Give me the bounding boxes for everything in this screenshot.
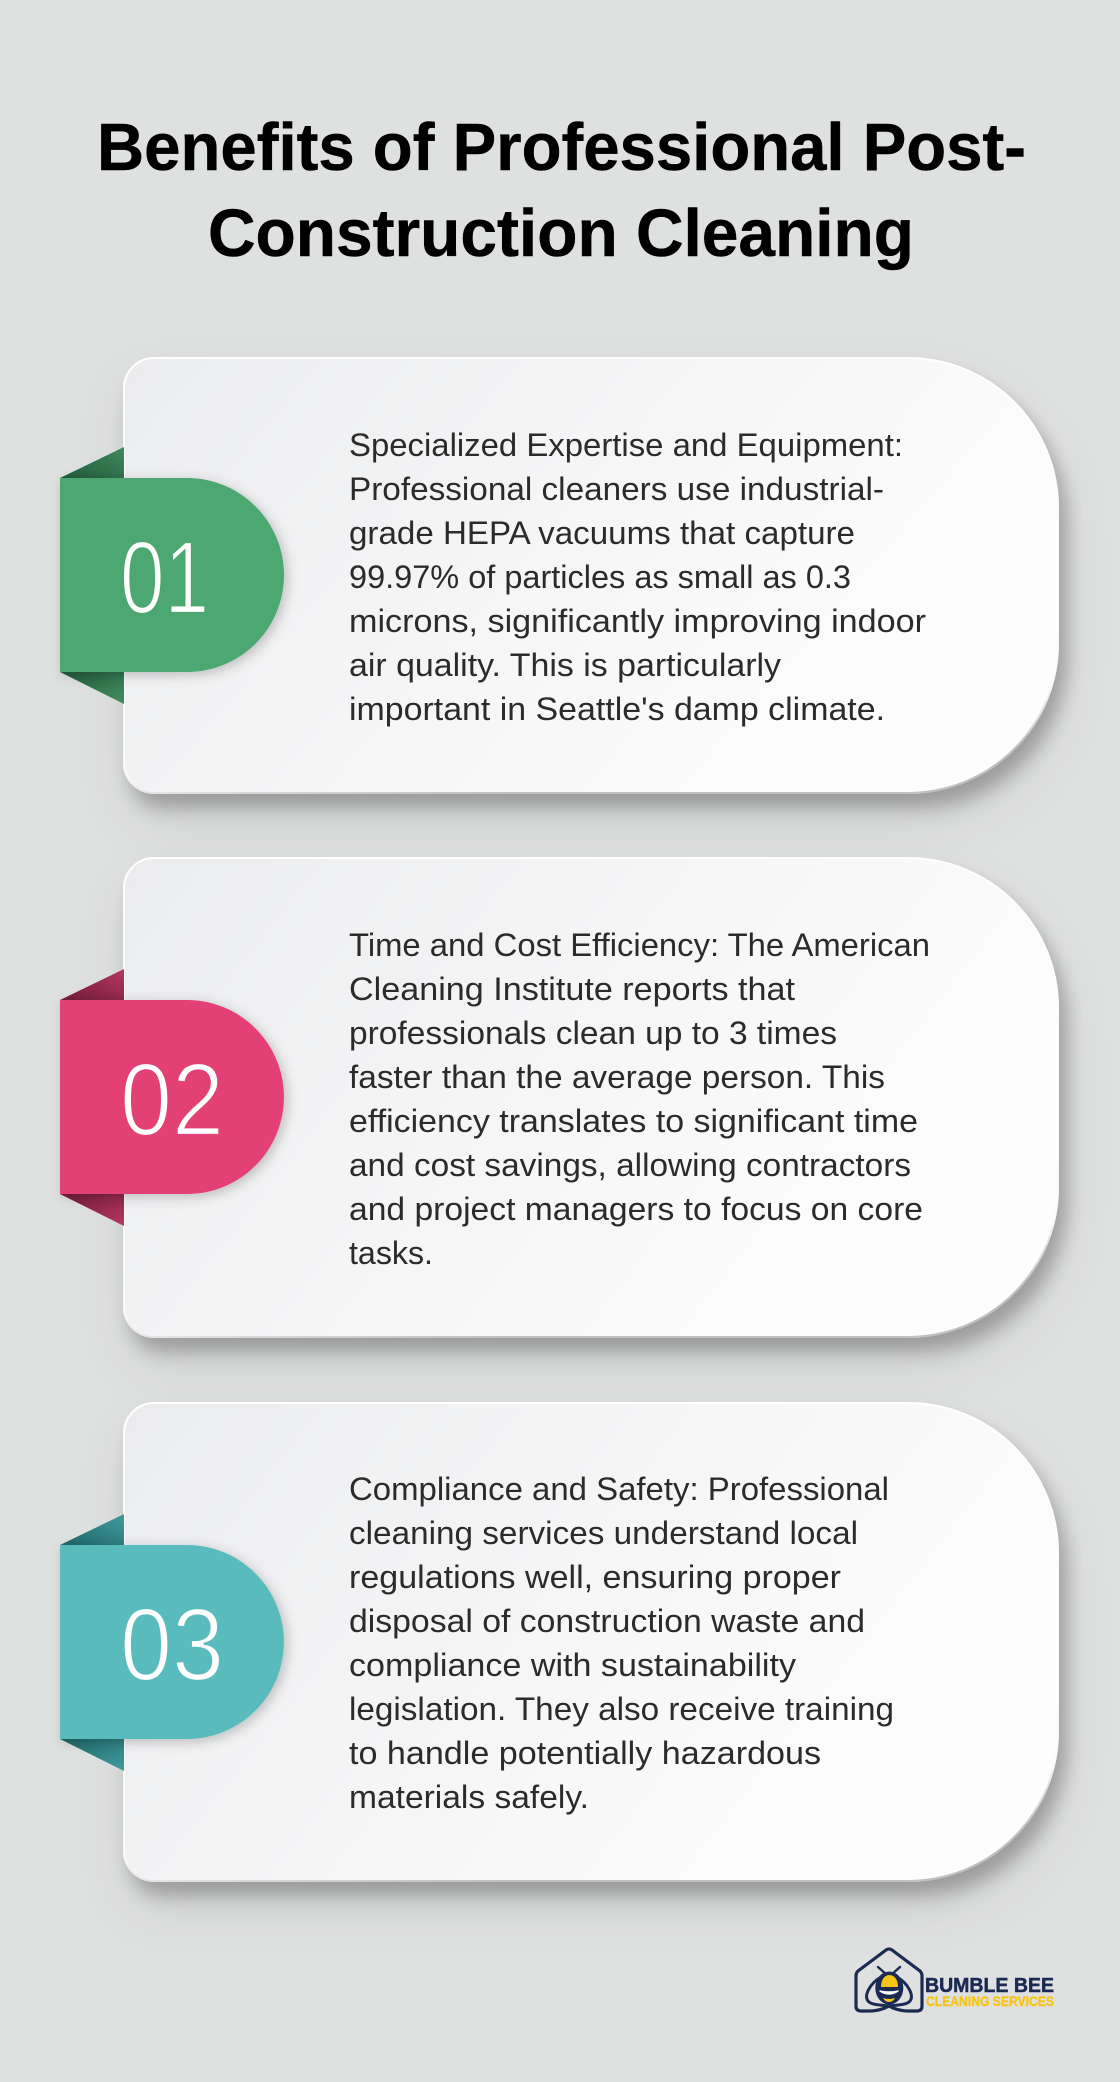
card 2 text: efficiency translates to significant time	[349, 1103, 918, 1139]
logo wordmark: BUMBLE BEE	[925, 1974, 1054, 1997]
card 3 text: materials safely.	[349, 1779, 589, 1815]
card 2 text: and cost savings, allowing contractors	[349, 1147, 911, 1183]
card 3 text: to handle potentially hazardous	[349, 1735, 821, 1771]
card 1 text: Specialized Expertise and Equipment:	[349, 427, 903, 463]
card 3 text: compliance with sustainability	[349, 1647, 797, 1683]
card 3 text	[349, 1471, 894, 1815]
card 3 background	[124, 1403, 1058, 1881]
card 2 text: Cleaning Institute reports that	[349, 971, 795, 1007]
title: Benefits of Professional Post-	[97, 110, 1026, 185]
panel: card 3 compliance and safety	[60, 1403, 1058, 1881]
logo wordmark	[925, 1974, 1054, 2009]
card 1 text: grade HEPA vacuums that capture	[349, 515, 855, 551]
card 3 text: regulations well, ensuring proper	[349, 1559, 841, 1595]
card 2 text: Time and Cost Efficiency: The American	[349, 927, 930, 963]
card 1 text: air quality. This is particularly	[349, 647, 782, 683]
card 3 text: disposal of construction waste and	[349, 1603, 865, 1639]
panel: card 1 specialized expertise	[60, 358, 1058, 793]
card 2 background	[124, 858, 1058, 1337]
card 1 text	[349, 427, 926, 727]
card 3 text: cleaning services understand local	[349, 1515, 858, 1551]
title	[97, 110, 1026, 271]
badge 02: 02	[120, 1042, 224, 1157]
card 2 text: faster than the average person. This	[349, 1059, 885, 1095]
title: Construction Cleaning	[208, 196, 914, 271]
card 1 background	[124, 358, 1058, 793]
badge 03	[60, 1514, 284, 1771]
card 2 text: professionals clean up to 3 times	[349, 1015, 837, 1051]
card 1 text: Professional cleaners use industrial-	[349, 471, 884, 507]
card 2 text: tasks.	[349, 1235, 433, 1271]
card 2 text	[349, 927, 930, 1271]
badge 01	[60, 447, 284, 704]
badge 03: 03	[120, 1587, 224, 1702]
badge 02	[60, 969, 284, 1226]
card 1 text: microns, significantly improving indoor	[349, 603, 926, 639]
logo wordmark: CLEANING SERVICES	[926, 1994, 1054, 2009]
panel: card 2 time and cost efficiency	[60, 858, 1058, 1337]
card 3 text: Compliance and Safety: Professional	[349, 1471, 889, 1507]
logo: Bumble Bee Cleaning Services	[856, 1949, 1054, 2011]
badge 01: 01	[120, 520, 209, 635]
card 3 text: legislation. They also receive training	[349, 1691, 894, 1727]
card 2 text: and project managers to focus on core	[349, 1191, 923, 1227]
icon: house outline with bee	[856, 1949, 922, 2011]
card 1 text: 99.97% of particles as small as 0.3	[349, 559, 851, 595]
card 1 text: important in Seattle's damp climate.	[349, 691, 885, 727]
